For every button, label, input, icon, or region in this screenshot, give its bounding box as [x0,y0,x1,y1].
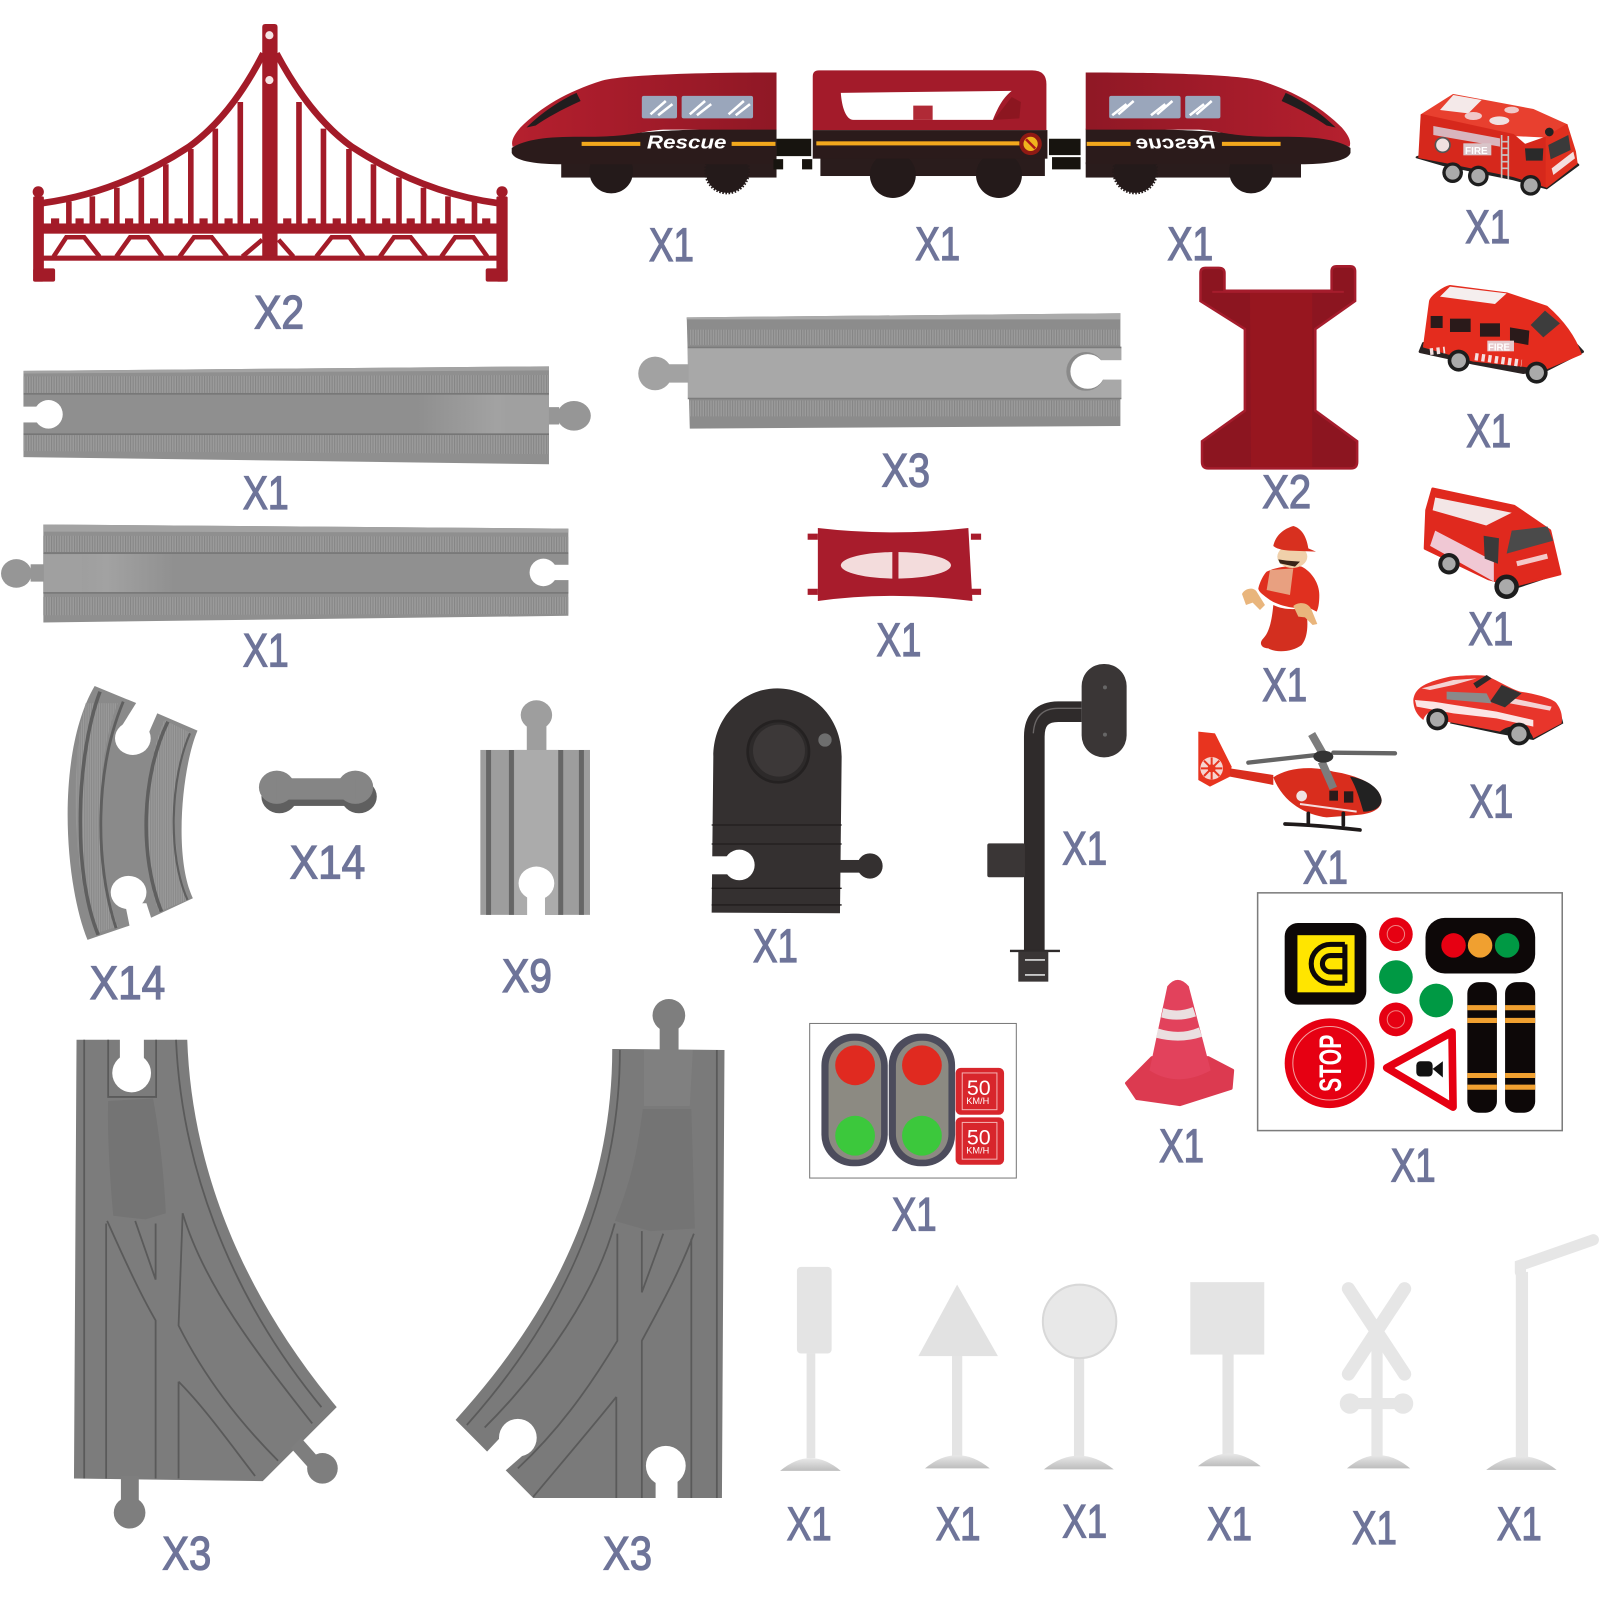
white sign: rectangle [780,1267,841,1471]
train: middle car [813,70,1047,198]
label: fire truck quantity: X1 [1465,201,1510,253]
label: traffic sticker quantity: X1 [892,1189,937,1241]
fire van: FIRE [1488,343,1511,354]
label: fire car quantity: X1 [1469,775,1513,827]
label: sign quantity: X1 [1062,1496,1107,1548]
black signal pole [987,664,1127,982]
white street lamp [1486,1240,1593,1470]
label: rescue truck quantity: X1 [1468,603,1513,655]
label: sign quantity: X1 [936,1498,981,1550]
label: short track quantity: X9 [502,950,552,1002]
left turnout track [74,1038,338,1529]
sticker: traffic lights and speed signs: KM/H [966,1146,989,1156]
right turnout track [456,999,724,1500]
long track with ramp, peg right [22,366,591,464]
coupler rear [1049,139,1081,169]
label: sign quantity: X1 [1352,1502,1397,1554]
label: signal pole quantity: X1 [1062,822,1107,874]
label: firefighter quantity: X1 [1262,659,1307,711]
fire truck: FIRE [1465,146,1488,157]
label: rear car quantity: X1 [1167,218,1213,270]
white sign: square [1190,1282,1264,1466]
label: middle car quantity: X1 [915,218,960,270]
white sign: railway crossing [1340,1289,1413,1468]
label: cone quantity: X1 [1159,1120,1204,1172]
label: sign quantity: X1 [1207,1498,1252,1550]
label: fire van quantity: X1 [1466,405,1511,457]
coupler front [773,139,812,169]
label: sign quantity: X1 [787,1498,832,1550]
bridge pillar [1200,266,1357,468]
label: long track quantity: X1 [243,624,289,676]
white sign: triangle [918,1285,998,1468]
bridge tower [33,24,508,282]
firefighter figure [1242,526,1319,651]
label: curved track quantity: X14 [90,957,165,1009]
sticker sheet: road signs: STOP [1312,1035,1348,1092]
label: helicopter quantity: X1 [1303,842,1348,894]
fire car [1413,675,1563,745]
label: connector quantity: X14 [290,837,365,889]
label: pillar quantity: X2 [1262,466,1311,518]
sticker: traffic lights and speed signs: 50 [967,1125,991,1149]
sticker: traffic lights and speed signs [810,1023,1016,1178]
train: front car: Rescue [647,131,727,152]
label: straight track quantity: X3 [882,445,930,497]
label: right turnout quantity: X3 [603,1527,652,1579]
straight track x3 [638,313,1122,429]
red traffic cone [1127,980,1233,1105]
train: front car [512,72,777,193]
label: long track quantity: X1 [243,467,289,519]
label: bridge quantity: X2 [254,287,304,339]
rescue truck [1425,489,1560,599]
label: connector quantity: X1 [877,614,921,666]
short straight track [480,700,590,917]
fire truck [1417,95,1578,196]
label: control base quantity: X1 [753,920,798,972]
sticker: traffic lights and speed signs: 50 [967,1076,991,1100]
helicopter [1198,732,1395,830]
train: rear car: Rescue [1136,131,1215,152]
curved track [68,686,197,940]
white sign: circle [1043,1285,1116,1469]
sticker: traffic lights and speed signs: KM/H [966,1096,989,1106]
label: sticker sheet quantity: X1 [1391,1140,1436,1192]
long track with ramp, peg left [1,524,569,622]
label: left turnout quantity: X3 [162,1527,211,1579]
label: lamp quantity: X1 [1497,1498,1542,1550]
sticker sheet: road signs [1258,893,1562,1131]
black control base [710,688,883,913]
track connector bone [259,771,377,813]
label: front car quantity: X1 [649,219,694,271]
fire van [1420,286,1583,384]
train: rear car [1086,72,1350,193]
red bridge connector [808,528,981,601]
